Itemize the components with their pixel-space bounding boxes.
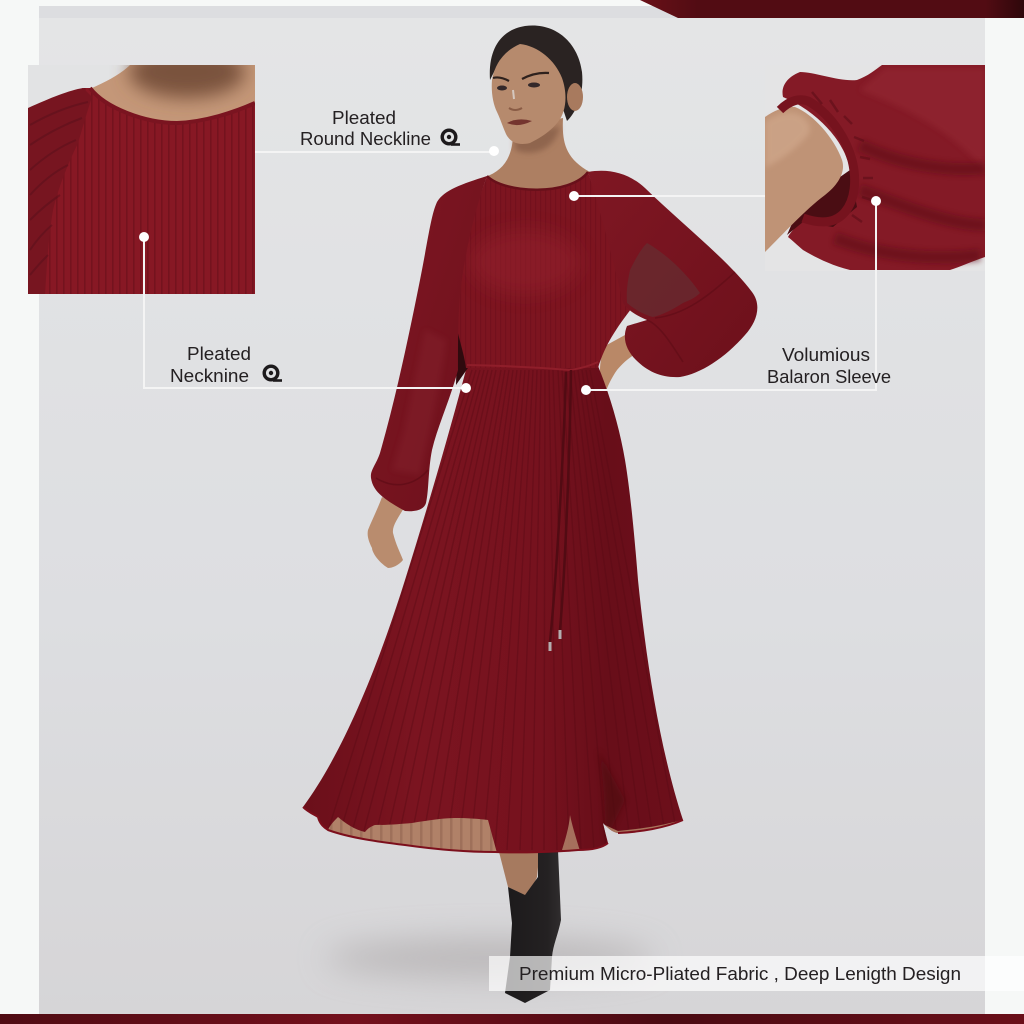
inset skin [92,65,255,124]
caption bar [489,956,1024,991]
skirt [303,366,683,852]
neck and chest [485,118,590,190]
label: voluminous sleeve: Balaron Sleeve [767,367,891,387]
sheer hem right [606,821,678,833]
hem edge [303,807,683,852]
left cuff fold [376,470,428,485]
inset sleeve gathers [30,102,88,275]
right sleeve sheer panel [627,243,700,317]
neckline [487,172,588,190]
left sleeve sheer [392,330,446,475]
sleeve gap shadow [456,296,470,385]
hair back [490,25,582,121]
label: pleated round neckline: Pleated [332,108,396,128]
inset neck trim [90,88,255,123]
sheer hem left [328,817,497,853]
inset raglan sleeve [28,88,92,294]
label: pleated neckline [170,344,251,386]
left hand [368,497,404,568]
waist belt [467,362,598,370]
belt tips [550,630,560,651]
caption bar: Premium Micro-Pliated Fabric , Deep Lenigth Design [519,964,961,984]
inset: neckline detail [28,46,255,294]
label: pleated round neckline [300,108,431,149]
inset lighter upper fold [868,71,982,160]
inset cuff band [780,100,855,222]
inset arm highlight [766,114,809,164]
skirt pleats [322,370,682,853]
neck shadow [515,126,560,153]
eyes, brows and mouth [493,73,549,125]
right hand on hip [595,335,637,397]
label: pleated neckline: Necknine [170,366,249,386]
inset: sleeve cuff detail [765,65,985,271]
left sleeve [371,176,487,511]
belt cords [550,370,571,642]
face [492,44,565,144]
boots [505,850,561,1003]
inset darker folds [835,145,985,257]
label: pleated round neckline: Round Neckline [300,129,431,149]
label: pleated neckline: Pleated [187,344,251,364]
callout lines [144,152,876,390]
bottom red band [0,1014,1024,1024]
right sleeve [588,171,757,377]
sheer hem middle [562,815,580,851]
right cuff fold [647,272,735,362]
model figure [303,25,757,1003]
inset gathers [812,92,873,222]
inset arm [765,107,843,252]
inset bodice pleats [28,88,255,294]
floor shadow [325,938,655,978]
callout dots [139,146,881,395]
bodice [452,172,634,368]
ear [567,83,583,111]
right skirt shadow [600,761,624,836]
label: voluminous sleeve [767,345,891,387]
icon: fabric roll [442,130,460,144]
icon: fabric roll [264,366,282,380]
top strip [39,6,699,18]
top red band [640,0,1024,18]
chest highlight [470,230,580,294]
label: voluminous sleeve: Volumious [782,345,870,365]
leg [498,848,540,897]
inset neck shadow [129,46,245,98]
inset dark interior [787,170,857,235]
